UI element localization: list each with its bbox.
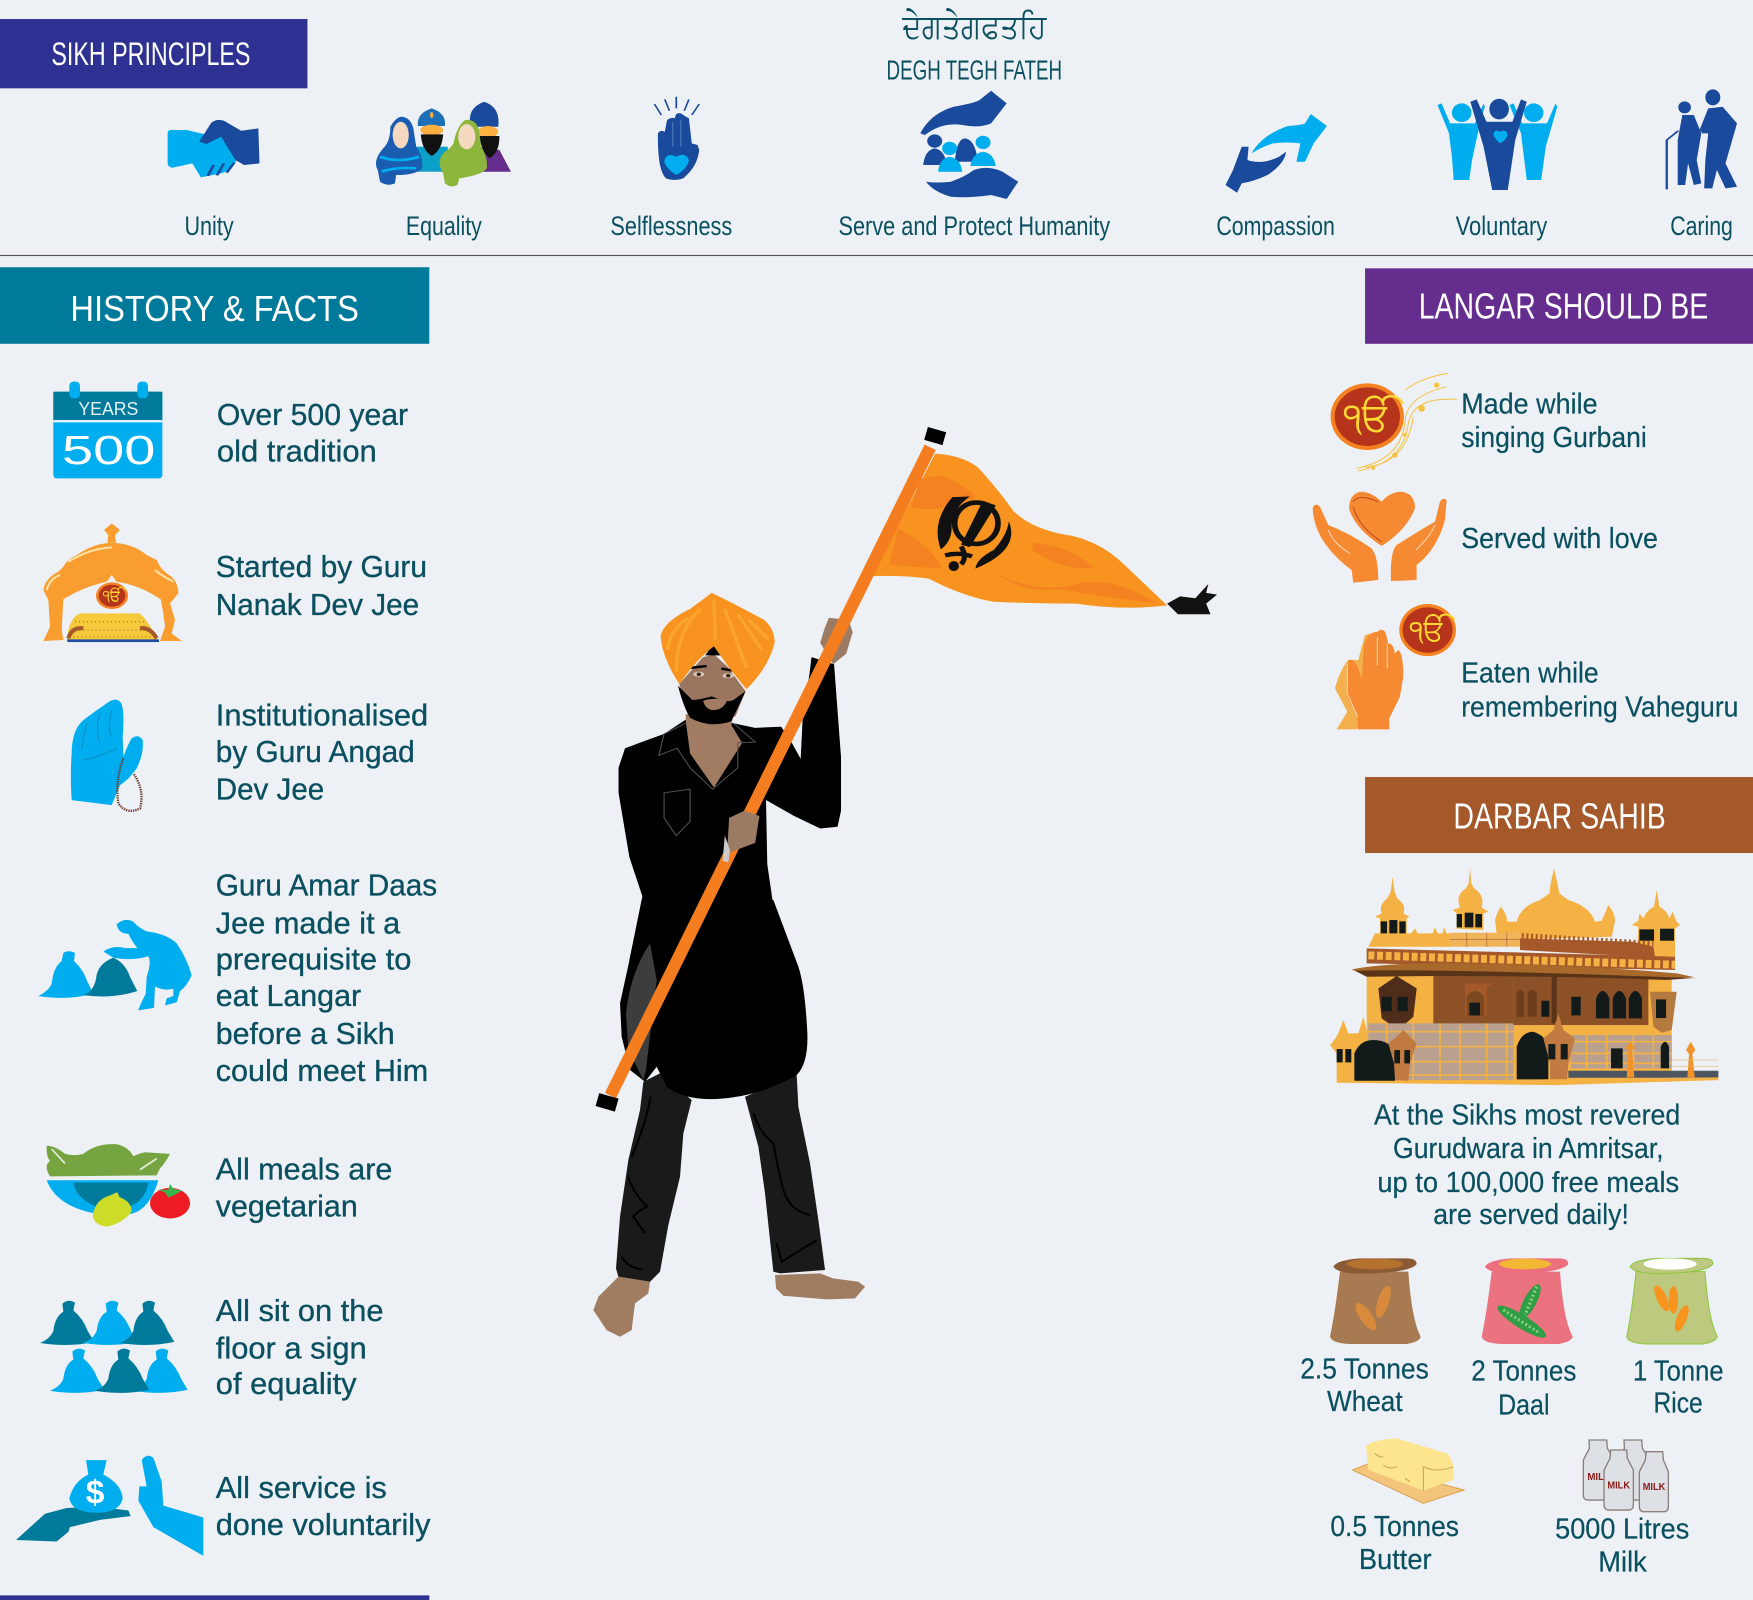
text: 100,000 free meals: are served daily!: [1433, 1199, 1629, 1231]
heading: darbar sahib: DARBAR SAHIB: [1453, 796, 1666, 836]
label: caring: Caring: [1670, 211, 1733, 241]
icon: 500 years calendar: [53, 382, 162, 478]
title: gurmukhi motto: ਦੇਗਤੇਗਫਤਹਿ: [901, 8, 1048, 46]
icon: person serving langar: [38, 920, 192, 1010]
text: all sit on the floor: of equality: [216, 1368, 358, 1401]
text: butter: Butter: [1359, 1544, 1432, 1576]
heading: sikh principles: [0, 19, 307, 88]
text: guru amar daas: eat Langar: [216, 980, 361, 1013]
text: all meals are vegetarian: vegetarian: [216, 1190, 358, 1223]
text: guru amar daas: could meet Him: [216, 1055, 428, 1088]
icon: vegetable bowl: [47, 1144, 190, 1227]
icon: money refused: $: [86, 1475, 105, 1512]
text: institutionalised: Institutionalised: [216, 700, 428, 733]
icon: rice sack: [1627, 1258, 1717, 1344]
icon: caring elders: [1667, 89, 1737, 189]
text: wheat: Wheat: [1327, 1386, 1403, 1418]
icon: emblem with music notes: ੴ: [1343, 396, 1403, 440]
text: milk: 5000 Litres: [1555, 1513, 1689, 1545]
text: butter: 0.5 Tonnes: [1330, 1511, 1459, 1543]
icon: milk bottles: MILK: [1607, 1480, 1631, 1491]
heading: sikh principles: SIKH PRINCIPLES: [51, 36, 250, 72]
panel: darbar sahib: [1300, 777, 1753, 1579]
icon: praying hands with emblem: ੴ: [1409, 613, 1455, 648]
label: compassion: Compassion: [1216, 211, 1335, 241]
text: all meals are vegetarian: All meals are: [216, 1153, 392, 1186]
title: degh tegh fateh: DEGH TEGH FATEH: [887, 54, 1062, 85]
text: institutionalised: Dev Jee: [216, 773, 324, 806]
icon: 500 years calendar: YEARS: [78, 399, 138, 419]
text: guru amar daas: Jee made it a: [216, 908, 400, 941]
flag: [872, 454, 1217, 614]
icon: butter block: [1353, 1438, 1464, 1503]
text: daal: 2 Tonnes: [1471, 1356, 1576, 1388]
label: selflessness: Selflessness: [610, 211, 732, 241]
heading: langar should be: [1365, 268, 1753, 344]
icon: serve and protect humanity: [920, 91, 1018, 199]
text: all service is voluntary: done voluntarily: [216, 1509, 431, 1542]
icon: emblem with music notes: [1331, 373, 1457, 471]
kurta fold: [626, 943, 657, 1080]
icon: 500 years calendar: 500: [62, 427, 155, 473]
icon: palki shrine: [43, 523, 182, 642]
label: unity: Unity: [184, 211, 234, 241]
icon: praying hands with emblem: [1335, 604, 1456, 729]
icon: hands with heart: [1313, 492, 1447, 583]
icon: daal sack: [1482, 1258, 1573, 1344]
label: voluntary: Voluntary: [1456, 211, 1548, 241]
panel: history and facts: [0, 267, 446, 1556]
text: milk: Milk: [1598, 1547, 1647, 1579]
icon: selfless hand: [654, 97, 699, 180]
icon: equality group: [376, 102, 511, 186]
text: made while singing gurbani: Made while: [1461, 388, 1598, 420]
text: rice: 1 Tonne: [1633, 1356, 1724, 1388]
icon: compassion hands: [1226, 114, 1327, 193]
text: institutionalised: by Guru Angad: [216, 736, 415, 769]
text: all sit on the floor: floor a sign: [216, 1332, 367, 1365]
text: guru amar daas: Guru Amar Daas: [216, 870, 437, 903]
text: started by guru nanak: Started by Guru: [216, 551, 427, 584]
panel: sikh principles: [0, 8, 1737, 241]
flagpole: [596, 427, 946, 1112]
icon: voluntary people: [1438, 99, 1557, 190]
text: made while singing gurbani: singing Gurbani: [1461, 422, 1647, 454]
icon: palki shrine: ੴ: [103, 588, 126, 605]
panel: langar should be: [1313, 268, 1753, 729]
heading: darbar sahib: [1365, 777, 1753, 853]
illustration: golden temple: [1330, 868, 1718, 1085]
text: daal: Daal: [1498, 1389, 1550, 1421]
text: all sit on the floor: All sit on the: [216, 1295, 383, 1328]
text: served with love: Served with love: [1461, 523, 1658, 555]
icon: unity handshake: [168, 120, 259, 177]
icon: milk bottles: MILK: [1643, 1482, 1666, 1493]
icon: money refused: [16, 1456, 203, 1556]
icon: hand with beads: [71, 700, 143, 811]
icon: milk bottles: [1583, 1440, 1668, 1512]
label: serve and protect humanity: Serve and Protect Humanity: [838, 211, 1111, 241]
text: guru amar daas: before a Sikh: [216, 1018, 395, 1051]
hand on pole: [723, 811, 759, 862]
text: 100,000 free meals: Gurudwara in Amritsar,: [1393, 1133, 1664, 1165]
man upper body: [619, 454, 1217, 960]
icon: wheat sack: [1330, 1258, 1421, 1344]
illustration: sikh man with nishan sahib flag: [593, 427, 1217, 1337]
man lower body: [593, 900, 865, 1337]
text: all service is voluntary: All service is: [216, 1472, 387, 1505]
icon: milk bottles: MIL: [1587, 1472, 1604, 1483]
text: 100,000 free meals: At the Sikhs most revered: [1374, 1100, 1680, 1132]
text: started by guru nanak: Nanak Dev Jee: [216, 589, 419, 622]
text: wheat: 2.5 Tonnes: [1300, 1354, 1429, 1386]
text: over 500 year: Over 500 year: [217, 399, 408, 432]
heading: history and facts: [0, 267, 429, 344]
text: eaten while remembering: Eaten while: [1461, 658, 1599, 690]
text: guru amar daas: prerequisite to: [216, 943, 411, 976]
label: equality: Equality: [406, 211, 482, 241]
text: 100,000 free meals: up to 100,000 free meals: [1377, 1167, 1679, 1199]
text: over 500 year: old tradition: [217, 436, 377, 469]
text: rice: Rice: [1653, 1388, 1703, 1420]
icon: people sitting on floor: [40, 1301, 188, 1393]
heading: history and facts: HISTORY & FACTS: [70, 289, 359, 329]
